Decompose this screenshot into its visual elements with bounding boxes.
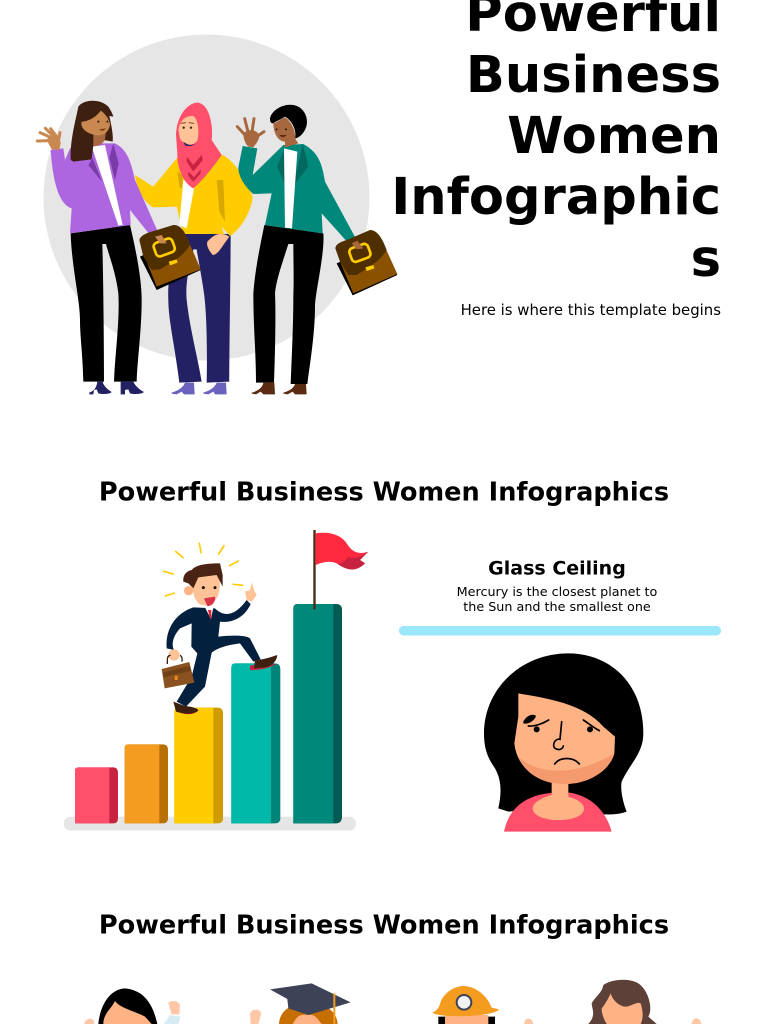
illustration: three business women	[37, 101, 397, 394]
panel description: the Sun and the smallest one	[463, 600, 651, 615]
briefcase right	[335, 230, 397, 295]
panel description	[457, 585, 658, 615]
light blue divider bar	[399, 626, 721, 636]
facial features	[523, 715, 599, 764]
row of women portraits	[84, 980, 702, 1024]
background circle	[44, 34, 370, 360]
title: s	[691, 230, 721, 289]
briefcase left	[139, 225, 201, 290]
head: woman in hijab	[176, 103, 222, 188]
title	[391, 0, 721, 289]
bar 2	[125, 744, 168, 823]
climbing businessman	[162, 563, 277, 714]
bar 4	[231, 663, 280, 823]
face	[514, 693, 615, 784]
portraits 1 and 2	[84, 983, 351, 1024]
sweater	[504, 793, 612, 832]
section heading 1: Powerful Business Women Infographics	[99, 478, 669, 508]
woman in teal jacket body	[238, 144, 357, 394]
panel heading: Glass Ceiling	[488, 558, 626, 580]
head and hand: woman in teal	[237, 105, 307, 147]
bar 1	[75, 767, 118, 823]
sparkle lines	[164, 543, 243, 596]
hair	[484, 653, 643, 814]
title: Women	[507, 107, 721, 166]
portrait 1: black hair	[84, 988, 181, 1024]
subtitle: Here is where this template begins	[461, 301, 721, 319]
panel description: Mercury is the closest planet to	[457, 585, 658, 600]
title: Infographic	[391, 168, 721, 227]
bar 5	[293, 604, 342, 823]
neck	[533, 780, 584, 820]
bar 3	[174, 708, 223, 823]
flag	[313, 530, 368, 609]
illustration: sad woman	[484, 653, 643, 832]
panel: glass ceiling	[399, 558, 721, 636]
woman in purple jacket body	[51, 143, 160, 394]
portrait 3: miner helmet	[432, 986, 533, 1024]
illustration: climbing bar chart	[64, 530, 368, 831]
ground shadow	[64, 817, 356, 831]
portrait 4: brown hair	[588, 980, 702, 1024]
portraits 3 and 4	[432, 980, 702, 1024]
section heading 2: Powerful Business Women Infographics	[99, 910, 669, 940]
woman in yellow jacket body	[135, 154, 253, 394]
title: Business	[466, 46, 721, 105]
head and hand: woman in purple	[37, 101, 113, 162]
portrait 2: graduation cap	[250, 983, 351, 1024]
